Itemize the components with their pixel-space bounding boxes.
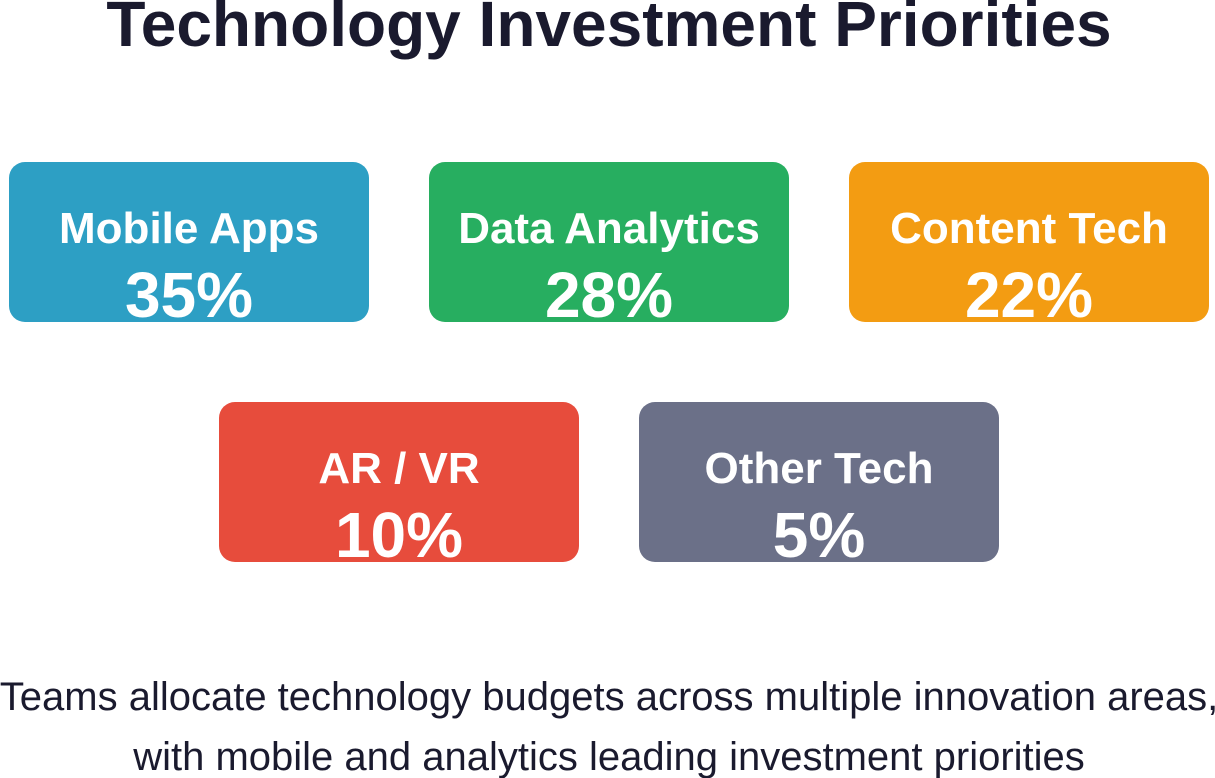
panel: Data Analytics: [429, 162, 789, 331]
panel: AR / VR: 10%: [335, 499, 463, 571]
panel: Content Tech: [849, 162, 1209, 331]
panel: Other Tech: [639, 402, 999, 571]
summary text: Teams allocate technology budgets across multiple innovation areas,: [0, 675, 1215, 719]
panel: AR / VR: [219, 402, 579, 571]
panel: AR / VR: AR / VR: [318, 444, 480, 493]
panel: Other Tech: 5%: [773, 499, 865, 571]
panel: Mobile Apps: [9, 162, 369, 331]
panel: Other Tech: Other Tech: [704, 444, 934, 493]
panel: Mobile Apps: 35%: [125, 259, 253, 331]
summary text: with mobile and analytics leading investment priorities: [132, 735, 1085, 778]
panel: Content Tech: Content Tech: [890, 204, 1168, 253]
panel: Data Analytics: 28%: [545, 259, 673, 331]
summary text: [0, 675, 1215, 778]
panel: Data Analytics: Data Analytics: [458, 204, 760, 253]
panel: Content Tech: 22%: [965, 259, 1093, 331]
panel: Mobile Apps: Mobile Apps: [59, 204, 319, 253]
